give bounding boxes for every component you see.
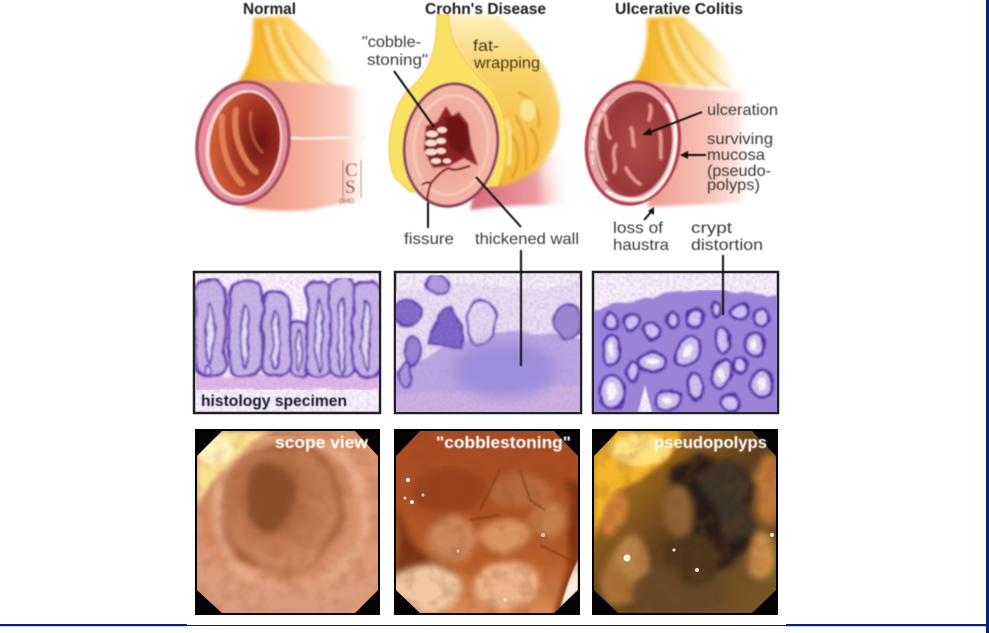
label: crypt distortion: distortion [691,237,763,254]
annotations: ulcerative colitis [613,102,778,315]
label: surviving mucosa [707,131,773,194]
histology panel: Crohn's [390,272,585,415]
cobblestones [425,127,451,164]
label: crypt distortion: crypt [691,220,733,237]
label: fat-wrapping: fat- [473,38,499,55]
lumen folds [222,110,262,184]
histology panel: ulcerative colitis [590,272,780,415]
heading: Normal: Normal [243,1,296,18]
colon opening: normal [187,74,299,212]
colon body: normal [243,80,369,211]
arrows: UC [642,112,723,315]
column headings [243,1,743,18]
lumen rings [214,436,366,588]
scope highlight [197,431,272,505]
scope label: scope view [275,433,369,452]
CS watermark: OHIO [339,199,355,205]
label: surviving mucosa: mucosa [707,147,765,164]
heading: Crohn's Disease: Crohn's Disease [425,1,546,18]
label: fat-wrapping [473,38,540,72]
colon body: UC [640,80,750,207]
label: cobblestoning: stoning" [367,52,428,69]
mesenteric fat: normal [237,16,350,88]
bright fold [594,431,680,540]
label: loss of haustra: haustra [613,237,669,254]
label: thickened wall: thickened wall [475,231,579,248]
pseudopolyps and mucosal islands [596,105,661,184]
CS watermark: S [345,177,356,198]
colon opening: Crohn's [395,76,507,214]
CS watermark [339,160,361,205]
lumen: Crohn's [424,106,478,168]
label: surviving mucosa: surviving [707,131,773,148]
fat wrapping: bright yellow [389,15,506,192]
fissure [422,166,470,201]
label: surviving mucosa: (pseudo- [707,163,771,180]
scope label: "cobblestoning" [436,433,571,452]
annotations: Crohn's [362,34,579,366]
scope photo: Crohn's [387,429,585,615]
cobblestone nodules [387,466,585,615]
label: loss of haustra [613,220,669,254]
heading: Ulcerative Colitis: Ulcerative Colitis [615,1,743,18]
distorted crypts [590,273,780,415]
illustration: normal colon [187,16,369,212]
label: fat-wrapping: wrapping [473,55,540,72]
scope label: pseudopolyps [654,433,767,452]
illustration: ulcerative colitis colon [577,16,750,212]
label: ulceration: ulceration [707,102,778,119]
submucosal granuloma mound [390,273,585,415]
CS watermark: C [345,160,358,181]
label: cobblestoning: "cobble- [362,34,421,51]
mesenteric fat: UC [631,16,745,88]
label: fissure: fissure [404,231,454,248]
leader lines: Crohn's [394,71,521,366]
illustration: Crohn's colon [389,15,572,214]
scope photo: normal [195,429,380,615]
histology label: histology specimen [201,393,347,410]
label: cobblestoning [362,34,428,69]
colon body: Crohn's [470,150,572,210]
scope photo: ulcerative colitis [592,429,785,616]
label: loss of haustra: loss of [613,220,664,237]
dark lumen and polyps [597,450,785,616]
histology panel: normal [190,272,385,413]
colon fold [288,137,366,139]
colon opening: UC [577,74,689,212]
fat wrapping: right lobes [449,15,566,186]
label: surviving mucosa: polyps) [707,177,760,194]
crypts: normal [190,273,385,412]
label: crypt distortion [691,220,763,254]
